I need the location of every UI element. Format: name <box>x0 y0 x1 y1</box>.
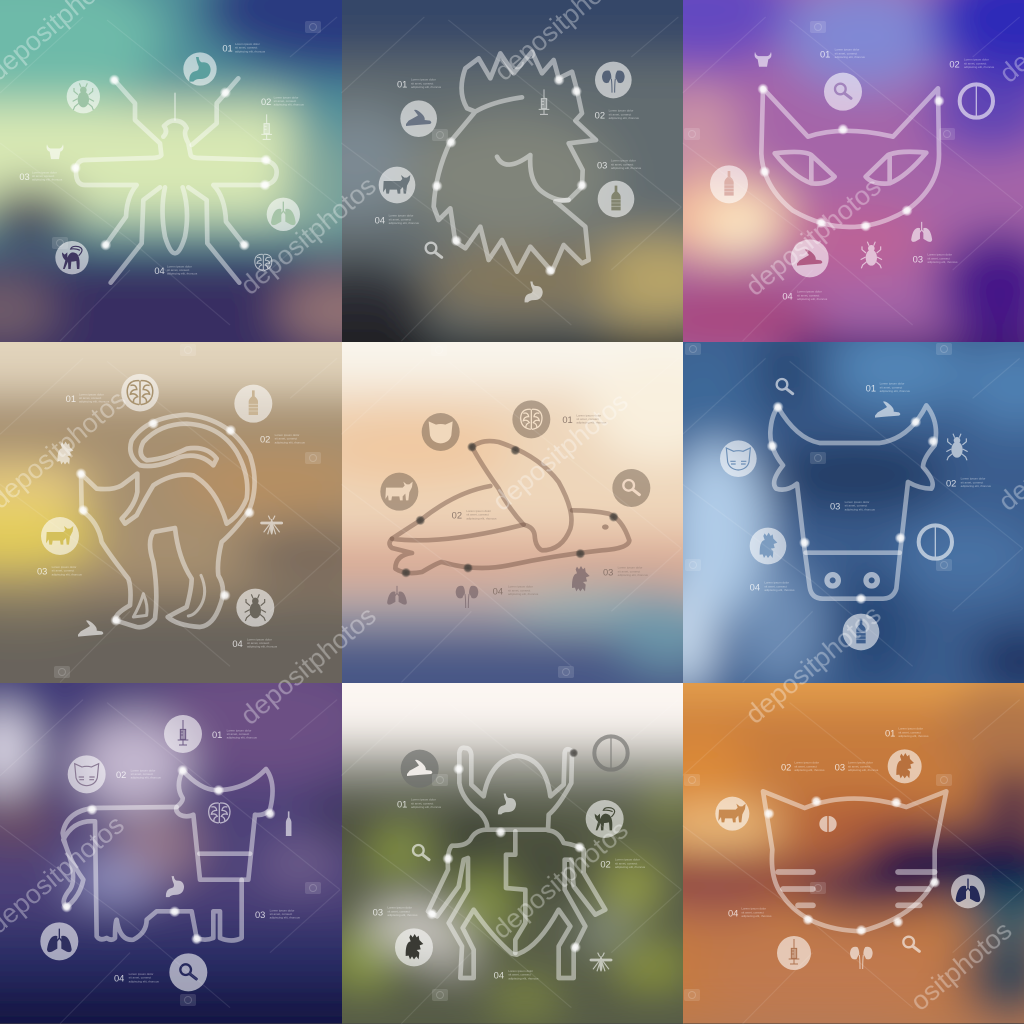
label 01: 01 <box>866 383 876 393</box>
label 03 <box>597 160 641 170</box>
label 01: Lorem ipsum dolor <box>79 392 104 396</box>
label 03: sit amet, consect <box>845 504 867 508</box>
label 02 <box>946 477 991 488</box>
icon: brain <box>209 803 230 823</box>
label 03: adipiscing elit, rhoncus <box>618 573 648 577</box>
label 01: 01 <box>397 79 407 89</box>
label 03: sit amet, consect <box>927 256 950 260</box>
rooster outline <box>434 52 596 272</box>
icon: ring <box>960 84 993 118</box>
label 02 <box>260 433 305 445</box>
label 03: sit amet, consect <box>611 162 634 166</box>
icon: lungs <box>387 586 407 605</box>
node dots <box>757 83 945 232</box>
label 02: 02 <box>452 511 462 521</box>
label 01: 01 <box>66 394 76 404</box>
label 03: 03 <box>255 910 265 920</box>
label 03: 03 <box>19 172 30 182</box>
label 04: adipiscing elit, rhoncus <box>129 979 159 983</box>
icon: ring <box>594 736 628 770</box>
label 04: sit amet, consect <box>764 584 787 588</box>
panel: cat head with whiskers <box>583 583 1024 1023</box>
label 01: Lorem ipsum dolor <box>227 728 251 732</box>
nostrils <box>827 575 877 586</box>
panel: rooster <box>342 0 683 342</box>
label 01: Lorem ipsum dolor <box>898 727 923 731</box>
label 01: sit amet, consect <box>79 396 102 400</box>
node dots <box>75 418 255 626</box>
blurred background <box>0 583 442 1023</box>
cat outline <box>81 415 255 627</box>
panel: cow <box>0 583 442 1023</box>
label 02: Lorem ipsum dolor <box>794 761 819 765</box>
label 04: Lorem ipsum dolor <box>764 581 789 585</box>
label 02: Lorem ipsum dolor <box>131 768 155 772</box>
label 01: Lorem ipsum dolor <box>411 78 436 82</box>
label 01: adipiscing elit, rhoncus <box>880 389 910 393</box>
label 01: adipiscing elit, rhoncus <box>79 400 110 404</box>
label 03: 03 <box>913 254 923 264</box>
icon: magnifier <box>426 243 442 257</box>
blurred background <box>342 0 683 342</box>
icon: rooster <box>572 566 590 591</box>
label 02: sit amet, consect <box>466 513 489 517</box>
icon: lungs <box>40 922 78 960</box>
label 01: Lorem ipsum dolor <box>235 42 260 46</box>
icon: rooster <box>750 528 786 564</box>
label 01: sit amet, consect <box>898 730 921 734</box>
icon: lungs <box>911 222 932 242</box>
label 04: 04 <box>114 974 124 984</box>
cat outline <box>761 88 939 227</box>
blurred background <box>0 242 442 784</box>
label 01: Lorem ipsum dolor <box>835 48 859 52</box>
label 03: sit amet, consect <box>618 569 640 573</box>
label 02: adipiscing elit, rhoncus <box>609 116 639 120</box>
icon: magnifier <box>824 73 862 111</box>
label 02: sit amet, consect <box>794 764 817 768</box>
label 02: sit amet, consect <box>275 437 297 441</box>
label 04: Lorem ipsum dolor <box>741 907 766 911</box>
label 02: Lorem ipsum dolor <box>964 58 989 62</box>
label 03: 03 <box>603 567 613 577</box>
icon: stomach <box>498 793 516 814</box>
label 04: Lorem ipsum dolor <box>129 972 153 976</box>
icon: cow <box>715 797 749 831</box>
label 02: adipiscing elit, rhoncus <box>964 65 995 69</box>
icon: cat face <box>720 440 757 477</box>
node dots <box>70 74 272 251</box>
label 01 <box>66 392 110 404</box>
icon: brain <box>121 374 159 411</box>
node dots <box>61 765 276 945</box>
label 04: sit amet, consect <box>797 293 820 297</box>
label 02: Lorem ipsum dolor <box>275 433 299 437</box>
label 04 <box>494 969 539 981</box>
icon: ring <box>919 525 952 559</box>
label 03: adipiscing elit, rhoncus <box>848 768 879 772</box>
watermark text: depositphotos <box>487 814 634 945</box>
label 03: sit amet, consect <box>52 569 74 573</box>
label 02 <box>261 96 304 106</box>
icon: beetle <box>946 434 968 460</box>
label 03: adipiscing elit, rhoncus <box>611 166 642 170</box>
label 02: sit amet, consect <box>961 480 983 484</box>
label 03: Lorem ipsum dolor <box>845 500 869 504</box>
icon: bird <box>78 620 103 637</box>
label 01: 01 <box>885 728 895 738</box>
panel: cat face with eyes <box>683 0 1024 342</box>
label 02: adipiscing elit, rhoncus <box>794 768 825 772</box>
label 03: Lorem ipsum dolor <box>270 908 294 912</box>
label 01 <box>820 48 865 59</box>
watermark text: depositphotos <box>487 386 634 517</box>
icon: cow head <box>47 144 63 159</box>
label 01: adipiscing elit, rhoncus <box>576 421 607 425</box>
label 01 <box>397 78 441 88</box>
label 02: 02 <box>260 435 270 445</box>
icon: mosquito <box>590 953 612 971</box>
label 02: adipiscing elit, rhoncus <box>131 776 161 780</box>
icon: bottle <box>598 181 634 217</box>
label 02 <box>452 509 497 521</box>
label 02: Lorem ipsum dolor <box>961 477 985 481</box>
icon: magnifier <box>903 937 919 951</box>
icon: mosquito <box>260 516 283 534</box>
icon: bottle <box>710 165 748 203</box>
node dots <box>767 401 939 604</box>
label 04: adipiscing elit, rhoncus <box>389 221 419 225</box>
eye <box>602 524 609 530</box>
icon: kidneys <box>850 947 873 969</box>
label 01: sit amet, consect <box>835 51 857 55</box>
label 02: 02 <box>949 59 960 69</box>
label 02 <box>949 58 995 69</box>
icon: thermometer bottle <box>286 811 291 836</box>
label 03 <box>37 565 82 577</box>
watermark text: depositphotos <box>740 171 887 302</box>
label 03: 03 <box>37 567 47 577</box>
blurred background <box>242 583 784 1023</box>
label 04: Lorem ipsum dolor <box>508 585 533 589</box>
label 03: adipiscing elit, rhoncus <box>927 260 958 264</box>
label 01 <box>212 728 257 740</box>
icon: cow <box>380 473 418 511</box>
label 02 <box>595 110 639 120</box>
icon: kidneys <box>456 586 478 608</box>
icon: bird <box>401 750 439 788</box>
label 03 <box>835 761 879 772</box>
label 03 <box>603 566 648 577</box>
icon: stomach <box>166 876 184 897</box>
icon: magnifier <box>413 845 429 860</box>
label 01: 01 <box>397 799 407 809</box>
label 04: adipiscing elit, rhoncus <box>167 272 198 276</box>
node dots <box>763 796 940 936</box>
label 02: Lorem ipsum dolor <box>274 95 298 99</box>
icon: bottle <box>234 385 272 423</box>
icon: magnifier <box>777 379 793 394</box>
watermark text: depositphotos <box>235 600 382 731</box>
label 01: sit amet, consect <box>880 385 902 389</box>
label 04: Lorem ipsum dolor <box>247 637 272 641</box>
label 04: Lorem ipsum dolor <box>508 969 533 973</box>
label 01: Lorem ipsum dolor <box>411 798 436 802</box>
label 04: adipiscing elit, rhoncus <box>508 976 539 980</box>
label 01: adipiscing elit, rhoncus <box>898 734 929 738</box>
panel: mosquito <box>0 0 342 342</box>
label 03 <box>373 906 418 917</box>
label 02: adipiscing elit, rhoncus <box>274 103 304 107</box>
watermark text: depositphotos <box>740 599 887 730</box>
label 02: sit amet, consect <box>274 99 296 103</box>
label 02: sit amet, consect <box>609 112 631 116</box>
label 03: 03 <box>597 160 607 170</box>
icon: small hemispheres <box>819 816 837 832</box>
label 03: Lorem ipsum dolor <box>618 566 642 570</box>
label 02: 02 <box>595 110 605 120</box>
label 03: sit amet, consect <box>270 912 292 916</box>
label 04 <box>782 290 828 301</box>
label 04: Lorem ipsum dolor <box>167 264 192 268</box>
label 04: sit amet, consect <box>247 641 270 645</box>
icon: bottle <box>843 614 879 650</box>
label 03: 03 <box>835 762 845 772</box>
icon: magnifier <box>169 953 207 991</box>
label 01 <box>397 798 442 809</box>
label 03 <box>20 172 62 181</box>
label 02: 02 <box>261 97 271 107</box>
label 04: 04 <box>375 215 385 225</box>
label 03: Lorem ipsum dolor <box>387 906 412 910</box>
label 04: 04 <box>232 639 243 649</box>
label 04: sit amet, consect <box>129 976 151 980</box>
icon: beetle <box>67 80 100 113</box>
label 04: Lorem ipsum dolor <box>389 214 413 218</box>
label 04: Lorem ipsum dolor <box>797 290 822 294</box>
watermark text: ositphotos <box>905 915 1017 1017</box>
label 03: sit amet, consect <box>387 909 410 913</box>
label 01 <box>562 413 607 425</box>
label 01: adipiscing elit, rhoncus <box>235 49 266 53</box>
label 02: sit amet, consect <box>131 772 153 776</box>
icon: magnifier <box>612 469 650 507</box>
label 04: 04 <box>782 291 793 301</box>
panel: arched cat <box>0 242 442 784</box>
icon: syringe <box>164 715 202 753</box>
icon: bird <box>791 239 829 277</box>
icon: bird <box>400 100 437 137</box>
blurred background <box>583 242 1024 784</box>
label 01 <box>885 727 929 738</box>
label 04 <box>114 972 159 984</box>
label 01: adipiscing elit, rhoncus <box>227 736 257 740</box>
label 04: 04 <box>728 908 738 918</box>
label 02: 02 <box>781 762 791 772</box>
label 03: 03 <box>830 502 840 512</box>
label 03: adipiscing elit, rhoncus <box>845 507 875 511</box>
label 02: Lorem ipsum dolor <box>609 109 633 113</box>
panel: beetle <box>242 583 784 1023</box>
icon: cat face <box>422 413 460 451</box>
icon: bird <box>875 401 900 418</box>
label 01: sit amet, consect <box>235 46 258 50</box>
label 02: 02 <box>116 770 126 780</box>
label 01: sit amet, consect <box>411 801 434 805</box>
label 03: 03 <box>373 907 383 917</box>
label 04 <box>493 585 539 596</box>
label 04 <box>750 581 795 592</box>
cow outline <box>63 769 273 940</box>
label 01 <box>222 43 265 53</box>
label 04 <box>154 266 198 275</box>
label 01: sit amet, consect <box>576 417 599 421</box>
label 02: adipiscing elit, rhoncus <box>466 516 497 520</box>
label 03: sit amet, consect <box>848 764 871 768</box>
label 04: sit amet, consect <box>741 910 764 914</box>
label 03 <box>255 908 300 920</box>
label 04: sit amet, consect <box>508 588 531 592</box>
label 01: 01 <box>562 415 573 425</box>
icon: beetle <box>236 589 274 627</box>
label 04: adipiscing elit, rhoncus <box>247 645 278 649</box>
node dots <box>401 442 619 578</box>
icon: stomach <box>525 281 543 302</box>
label 02: adipiscing elit, rhoncus <box>961 484 991 488</box>
label 02: adipiscing elit, rhoncus <box>615 865 646 869</box>
icon: kidneys <box>595 62 632 98</box>
icon: arched cat <box>55 241 89 274</box>
label 01: adipiscing elit, rhoncus <box>411 85 442 89</box>
label 01 <box>866 382 910 393</box>
label 02: 02 <box>946 478 956 488</box>
icon: brain <box>255 254 272 270</box>
icon: lungs <box>267 198 300 231</box>
label 04: 04 <box>494 971 504 981</box>
label 01: 01 <box>212 730 222 740</box>
label 03: Lorem ipsum dolor <box>52 565 76 569</box>
label 02: Lorem ipsum dolor <box>615 858 640 862</box>
bird outline <box>389 441 629 573</box>
label 03: adipiscing elit, rhoncus <box>270 916 300 920</box>
label 04: adipiscing elit, rhoncus <box>764 588 795 592</box>
dark node dot <box>569 748 578 758</box>
label 01: adipiscing elit, rhoncus <box>835 55 865 59</box>
label 03 <box>913 253 958 264</box>
blurred background <box>242 242 784 795</box>
label 03: sit amet, consect <box>32 174 55 178</box>
label 04: sit amet, consect <box>167 268 190 272</box>
cat head outline <box>763 791 946 931</box>
cow head outline <box>770 405 936 599</box>
label 04: 04 <box>154 266 165 276</box>
icon: brain <box>512 400 550 438</box>
blurred background <box>683 0 1024 342</box>
node dots <box>431 74 588 276</box>
label 01: 01 <box>820 49 830 59</box>
watermark text: depositphotos <box>235 170 382 301</box>
label 01: 01 <box>222 44 233 54</box>
icon: cow <box>41 517 79 555</box>
icon: rooster <box>888 749 922 783</box>
icon: cat face <box>68 755 106 793</box>
panel: bird <box>242 242 784 795</box>
label 04 <box>375 214 419 224</box>
label 03: adipiscing elit, rhoncus <box>32 178 63 182</box>
label 01: Lorem ipsum dolor <box>576 413 601 417</box>
label 02 <box>600 858 646 869</box>
mosquito outline <box>76 78 277 283</box>
label 03: Lorem ipsum dolor <box>32 170 57 174</box>
icon: stomach <box>183 52 217 86</box>
label 04: sit amet, consect <box>389 217 411 221</box>
blurred background <box>583 583 1024 1023</box>
icon: cow <box>379 167 415 203</box>
icon: arched cat <box>586 800 624 838</box>
icon: cow head <box>755 52 771 67</box>
icon: syringe <box>261 114 272 139</box>
icon: syringe <box>539 89 549 114</box>
label 03: Lorem ipsum dolor <box>611 159 636 163</box>
label 02 <box>781 761 825 772</box>
beetle outline <box>428 748 605 978</box>
label 04: 04 <box>493 586 503 596</box>
label 02: sit amet, consect <box>964 61 987 65</box>
label 03: Lorem ipsum dolor <box>927 253 952 257</box>
icon: beetle <box>861 242 882 268</box>
label 04 <box>728 907 772 918</box>
icon: lungs <box>951 874 985 908</box>
label 04 <box>232 637 278 649</box>
label 03: adipiscing elit, rhoncus <box>52 572 82 576</box>
label 01: sit amet, consect <box>227 732 249 736</box>
icon: syringe <box>777 936 811 970</box>
label 04: adipiscing elit, rhoncus <box>508 592 539 596</box>
icon: rooster <box>395 928 433 966</box>
label 03 <box>830 500 875 512</box>
label 04: adipiscing elit, rhoncus <box>797 297 828 301</box>
label 03: Lorem ipsum dolor <box>848 761 873 765</box>
label 01: sit amet, consect <box>411 81 434 85</box>
icon: rooster <box>57 442 73 464</box>
label 04: 04 <box>750 582 760 592</box>
label 02: Lorem ipsum dolor <box>466 509 491 513</box>
label 02: sit amet, consect <box>615 861 638 865</box>
panel: cow head <box>583 242 1024 784</box>
blurred background <box>0 0 342 342</box>
label 02 <box>116 768 161 780</box>
label 01: adipiscing elit, rhoncus <box>411 805 442 809</box>
label 03: adipiscing elit, rhoncus <box>387 913 418 917</box>
node dots <box>426 763 585 953</box>
label 01: Lorem ipsum dolor <box>880 382 904 386</box>
label 02: adipiscing elit, rhoncus <box>275 440 305 444</box>
label 04: sit amet, consect <box>508 973 531 977</box>
label 02: 02 <box>600 859 611 869</box>
label 04: adipiscing elit, rhoncus <box>741 914 772 918</box>
